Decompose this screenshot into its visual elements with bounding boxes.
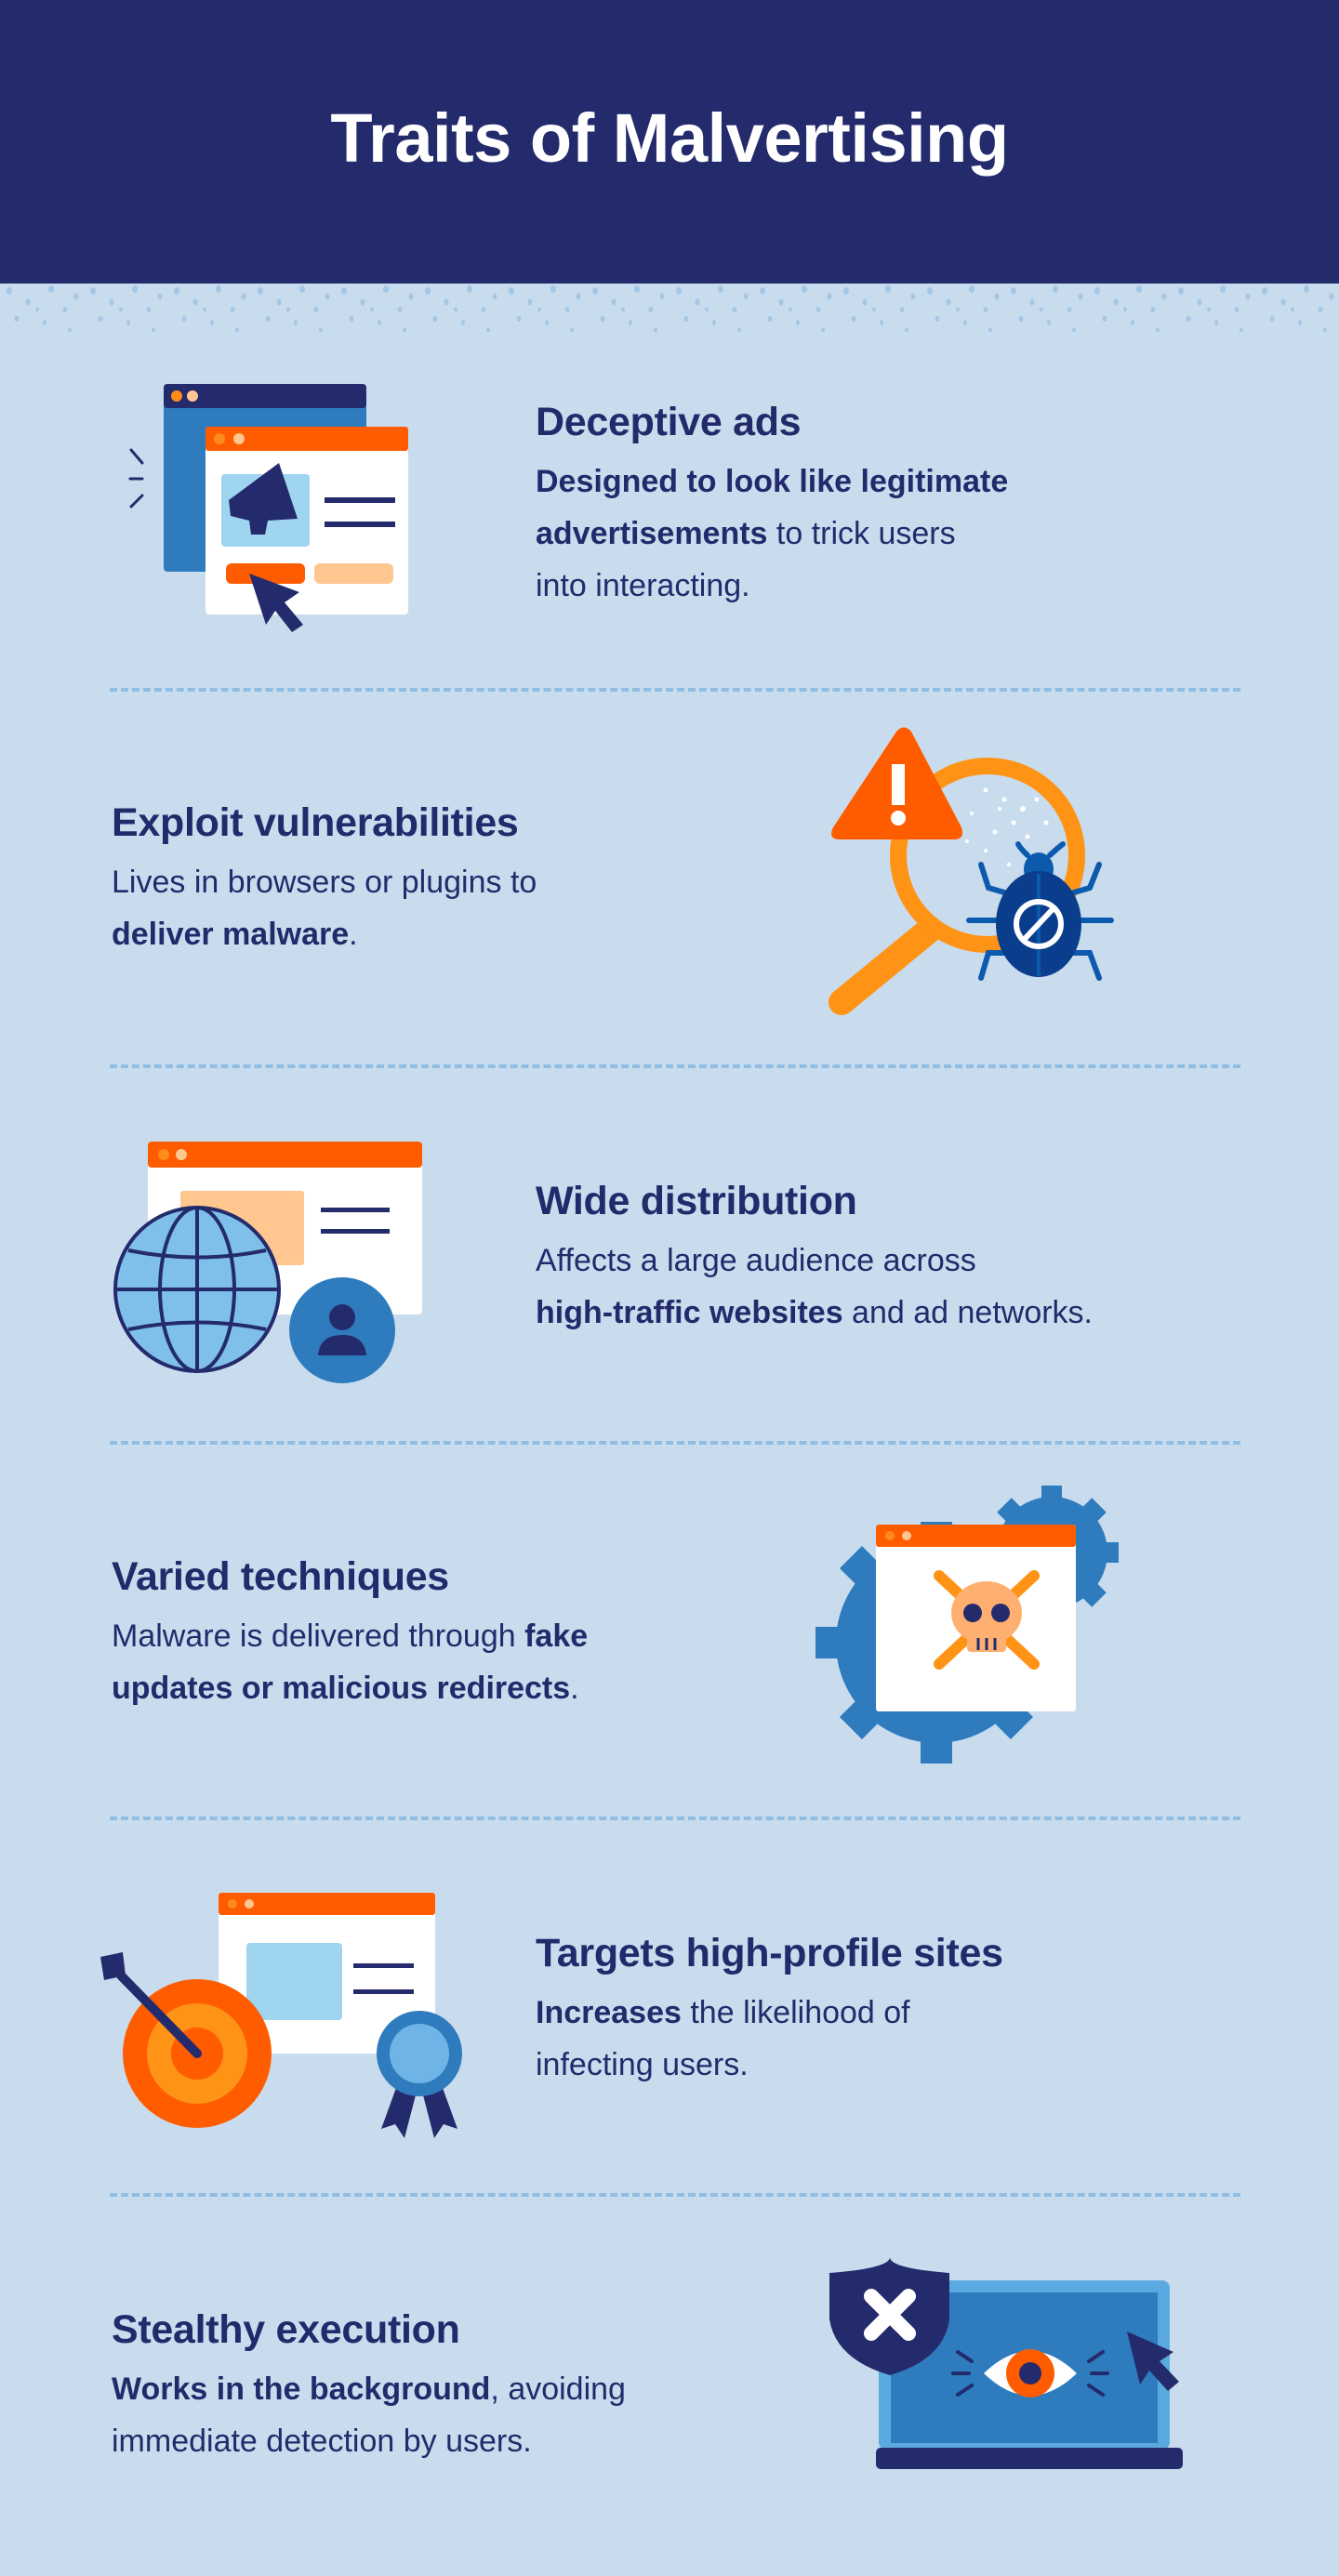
text: varied techniques: Varied techniques	[112, 1554, 449, 1599]
text: stealthy execution	[112, 2307, 626, 2459]
text: stealthy execution: Stealthy execution	[112, 2307, 460, 2352]
text: wide distribution: Wide distribution	[536, 1179, 857, 1223]
text: deceptive ads	[536, 400, 1008, 603]
text: stealthy execution: Works in the background, avoiding	[112, 2371, 626, 2407]
text: targets high-profile sites: Increases the likelihood of	[536, 1995, 910, 2030]
title: Traits of Malvertising	[330, 99, 1009, 177]
text: targets high-profile sites	[536, 1931, 1003, 2082]
text: targets high-profile sites: infecting users.	[536, 2047, 749, 2082]
text: deceptive ads: into interacting.	[536, 568, 750, 603]
text: wide distribution: Affects a large audience across	[536, 1243, 976, 1278]
text: varied techniques: updates or malicious redirects.	[112, 1671, 579, 1706]
text: deceptive ads: Deceptive ads	[536, 400, 801, 444]
text: exploit vulnerabilities: Lives in browsers or plugins to	[112, 865, 537, 900]
speckle band	[7, 285, 1333, 333]
text: stealthy execution: immediate detection by users.	[112, 2424, 532, 2459]
text: deceptive ads: Designed to look like legitimate	[536, 464, 1008, 499]
text: exploit vulnerabilities: Exploit vulnerabilities	[112, 800, 519, 845]
text: varied techniques: Malware is delivered through fake	[112, 1618, 588, 1654]
text: wide distribution: high-traffic websites and ad networks.	[536, 1295, 1093, 1330]
text: exploit vulnerabilities: deliver malware.	[112, 917, 358, 952]
text: targets high-profile sites: Targets high-profile sites	[536, 1931, 1003, 1975]
text: varied techniques	[112, 1554, 588, 1706]
text: deceptive ads: advertisements to trick users	[536, 516, 956, 551]
text: exploit vulnerabilities	[112, 800, 537, 952]
text: wide distribution	[536, 1179, 1093, 1330]
header band	[0, 0, 1339, 284]
